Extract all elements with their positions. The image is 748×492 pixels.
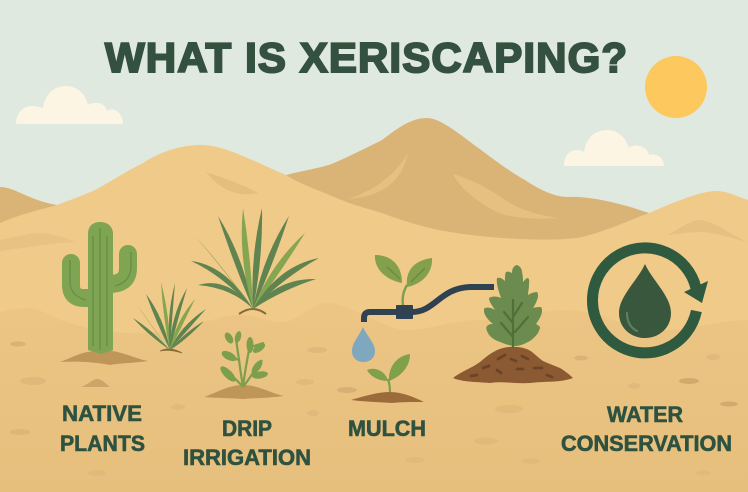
icon: seedling above hose bbox=[375, 255, 432, 306]
icon: shrub on mulch pile bbox=[453, 265, 573, 383]
foreground sand bbox=[0, 303, 748, 492]
cloud: left bbox=[16, 86, 123, 124]
dune streak: centre bbox=[206, 172, 258, 194]
icon: large agave bbox=[191, 208, 319, 314]
sand ground with front dunes bbox=[0, 145, 748, 492]
label: mulch: MULCH bbox=[348, 416, 426, 441]
label: native plants: PLANTS bbox=[60, 431, 145, 456]
dune streak: right bbox=[667, 220, 748, 242]
label: native plants: NATIVE bbox=[62, 401, 142, 426]
pebbles bbox=[10, 342, 738, 476]
far dune: left bbox=[0, 187, 60, 240]
dune streak: left bbox=[0, 233, 75, 251]
mountain highlight: right bbox=[453, 174, 558, 219]
label: drip irrigation: IRRIGATION bbox=[183, 445, 311, 470]
icon: water conservation cycle bbox=[592, 248, 708, 353]
label: water conservation: CONSERVATION bbox=[561, 431, 732, 456]
icon: seedling on mound bbox=[351, 354, 424, 403]
mountain: back bbox=[280, 118, 660, 260]
mountain highlight: left bbox=[348, 153, 408, 199]
icon: blue water drop bbox=[352, 327, 375, 362]
icon: cactus with soil mound bbox=[60, 222, 148, 365]
label: drip irrigation: DRIP bbox=[222, 416, 272, 441]
label: drip irrigation bbox=[183, 416, 311, 470]
icon: leafy sprout with mound bbox=[204, 330, 284, 399]
label: water conservation: WATER bbox=[607, 402, 683, 427]
icon: drip hose bbox=[364, 287, 494, 322]
label: water conservation bbox=[561, 402, 732, 456]
sun bbox=[645, 56, 707, 118]
cloud: right bbox=[564, 130, 664, 166]
label: native plants bbox=[60, 401, 145, 456]
title: WHAT IS XERISCAPING? bbox=[105, 34, 627, 81]
icon: small agave bbox=[133, 282, 206, 353]
